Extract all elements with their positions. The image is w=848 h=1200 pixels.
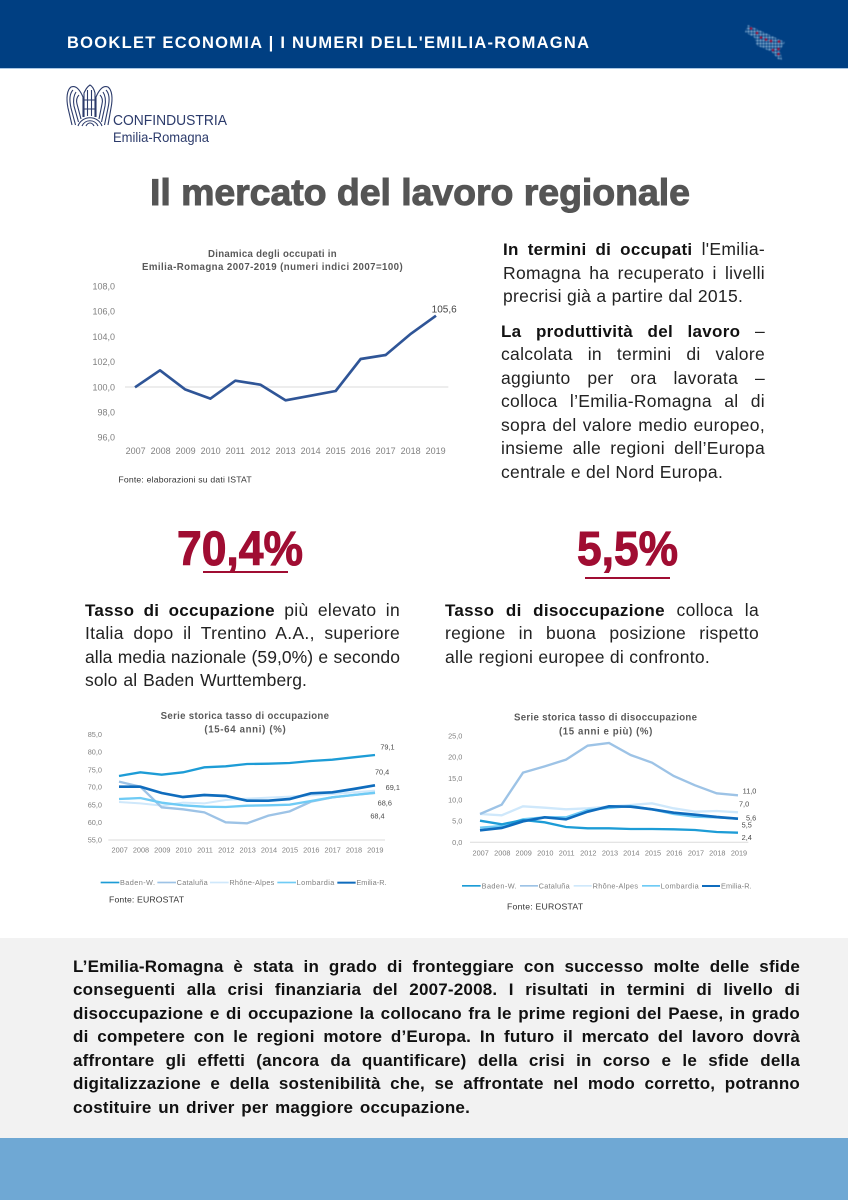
conclusion text: disoccupazione e di occupazione la collocano fra le prime regioni del Paese, in grado bbox=[73, 1004, 800, 1023]
text: tasso di occupazione: Italia dopo il Trentino A.A., superiore bbox=[85, 623, 400, 643]
text: produttività: La produttività del lavoro – bbox=[501, 321, 765, 341]
text: tasso di occupazione: Tasso di occupazione più elevato in bbox=[85, 600, 400, 620]
y axis labels bbox=[93, 282, 115, 443]
chart title: (15 anni e più) (%) bbox=[559, 726, 652, 737]
x axis labels: 2012 bbox=[250, 446, 270, 456]
y axis labels: 0,0 bbox=[452, 838, 462, 847]
end value labels: 2,4 bbox=[742, 833, 752, 842]
text: tasso di occupazione: solo al Baden Wurttemberg. bbox=[85, 670, 307, 690]
x axis labels: 2017 bbox=[688, 849, 704, 858]
panel: conclusion bbox=[0, 938, 848, 1138]
x axis labels: 2014 bbox=[623, 849, 639, 858]
text: occupati bbox=[503, 239, 765, 306]
legend: Baden-W. bbox=[482, 881, 517, 890]
end value labels: 11,0 bbox=[743, 787, 756, 796]
y axis labels bbox=[88, 730, 102, 845]
chart title bbox=[514, 713, 698, 737]
chart title: Emilia-Romagna 2007-2019 (numeri indici 2007=100) bbox=[142, 262, 403, 273]
y axis labels: 70,0 bbox=[88, 783, 102, 792]
header title: BOOKLET ECONOMIA | I NUMERI DELL'EMILIA-ROMAGNA bbox=[67, 34, 589, 52]
end value labels: 68,4 bbox=[370, 812, 385, 821]
text: occupati: Romagna ha recuperato i livelli bbox=[503, 263, 765, 283]
text: produttività: aggiunto per ora lavorata – bbox=[501, 368, 765, 388]
chart title: Dinamica degli occupati in bbox=[208, 249, 337, 260]
y axis labels: 80,0 bbox=[88, 748, 102, 757]
source note: Fonte: elaborazioni su dati ISTAT bbox=[118, 474, 252, 484]
x axis labels bbox=[473, 849, 747, 858]
stat: 5,5%: 5,5% bbox=[577, 523, 678, 576]
x axis labels: 2018 bbox=[346, 846, 362, 855]
y axis labels: 108,0 bbox=[93, 282, 115, 292]
conclusion text: di competere con le regioni motore d’Europa. In futuro il mercato del lavoro dovrà bbox=[73, 1027, 800, 1046]
source note: Fonte: EUROSTAT bbox=[109, 895, 185, 905]
x axis labels: 2015 bbox=[326, 446, 346, 456]
y axis labels: 106,0 bbox=[93, 307, 115, 317]
y axis labels: 75,0 bbox=[88, 765, 102, 774]
end value labels bbox=[370, 743, 400, 821]
line: Cataluña bbox=[480, 743, 738, 814]
x axis labels: 2013 bbox=[276, 446, 296, 456]
legend: Emilia-R. bbox=[721, 881, 752, 890]
text: produttività: sopra del valore medio europeo, bbox=[501, 415, 765, 435]
x axis labels: 2015 bbox=[282, 846, 298, 855]
header band bbox=[0, 0, 848, 69]
text: produttività: calcolata in termini di valore bbox=[501, 344, 765, 364]
x axis labels: 2019 bbox=[426, 446, 446, 456]
x axis labels: 2012 bbox=[580, 849, 596, 858]
y axis labels: 55,0 bbox=[88, 836, 102, 845]
x axis labels: 2008 bbox=[494, 849, 510, 858]
x axis labels: 2017 bbox=[376, 446, 396, 456]
x axis labels: 2011 bbox=[197, 846, 213, 855]
x axis labels: 2009 bbox=[154, 846, 170, 855]
end value labels: 79,1 bbox=[380, 743, 395, 752]
x axis labels: 2013 bbox=[240, 846, 256, 855]
x axis labels: 2019 bbox=[731, 849, 747, 858]
x axis labels: 2013 bbox=[602, 849, 618, 858]
end value labels: 7,0 bbox=[739, 799, 749, 808]
line: Emilia-R. bbox=[480, 806, 738, 830]
text: tasso di occupazione: alla media nazionale (59,0%) e secondo bbox=[85, 647, 400, 667]
chart title bbox=[161, 711, 330, 736]
text: occupati: precrisi già a partire dal 2015. bbox=[503, 286, 743, 306]
x axis labels: 2010 bbox=[537, 849, 553, 858]
x axis labels: 2009 bbox=[176, 446, 196, 456]
y axis labels: 5,0 bbox=[452, 817, 462, 826]
x axis labels: 2016 bbox=[666, 849, 682, 858]
end value labels: 68,6 bbox=[378, 798, 392, 807]
icon: eagle emblem bbox=[67, 85, 112, 126]
x axis labels: 2011 bbox=[226, 446, 245, 456]
legend: Lombardia bbox=[661, 881, 700, 890]
text: produttività bbox=[501, 321, 765, 482]
logo: Confindustria Emilia-Romagna bbox=[67, 85, 227, 145]
x axis labels: 2007 bbox=[126, 446, 146, 456]
chart title bbox=[142, 249, 403, 273]
conclusion text: conseguenti alla crisi finanziaria del 2007-2008. I risultati in termini di livello di bbox=[73, 980, 800, 999]
end value labels: 5,5 bbox=[742, 821, 752, 830]
conclusion text: costituire un driver per maggiore occupazione. bbox=[73, 1098, 470, 1117]
conclusion text: digitalizzazione e della sostenibilità che, se affrontate nel modo corretto, potranno bbox=[73, 1074, 800, 1093]
x axis labels: 2017 bbox=[325, 846, 341, 855]
line: Baden-W. bbox=[119, 755, 375, 776]
y axis labels: 85,0 bbox=[88, 730, 102, 739]
title: Il mercato del lavoro regionale bbox=[150, 171, 690, 213]
x axis labels: 2007 bbox=[112, 846, 128, 855]
legend: Rhône-Alpes bbox=[593, 881, 638, 890]
line: occupati index bbox=[135, 316, 436, 400]
y axis labels: 15,0 bbox=[448, 774, 462, 783]
x axis labels: 2016 bbox=[303, 846, 319, 855]
line: Lombardia bbox=[480, 806, 738, 828]
chart title: Serie storica tasso di disoccupazione bbox=[514, 713, 698, 724]
legend: Rhône-Alpes bbox=[229, 878, 275, 887]
line: Emilia-R. bbox=[119, 785, 375, 801]
x axis labels: 2008 bbox=[133, 846, 149, 855]
legend bbox=[101, 878, 387, 887]
logo wordmark: CONFINDUSTRIA bbox=[113, 113, 227, 129]
y axis labels bbox=[448, 732, 462, 847]
stat: 70,4%: 70,4% bbox=[177, 523, 303, 576]
y axis labels: 100,0 bbox=[93, 382, 115, 392]
text: tasso di disoccupazione: Tasso di disoccupazione colloca la bbox=[445, 600, 759, 620]
source note: Fonte: EUROSTAT bbox=[507, 901, 584, 911]
chart: dinamica degli occupati bbox=[93, 249, 457, 484]
value label: 105,6 bbox=[432, 304, 457, 315]
chart title: (15-64 anni) (%) bbox=[204, 725, 286, 736]
legend: Lombardia bbox=[297, 878, 335, 887]
legend bbox=[462, 881, 752, 890]
x axis labels bbox=[126, 446, 446, 456]
x axis labels: 2007 bbox=[473, 849, 489, 858]
text: produttività: colloca l’Emilia-Romagna al di bbox=[501, 391, 765, 411]
text: tasso di disoccupazione bbox=[445, 600, 759, 667]
line: Rhône-Alpes bbox=[480, 803, 738, 815]
end value labels: 5,6 bbox=[746, 813, 756, 822]
y axis labels: 20,0 bbox=[448, 752, 462, 761]
y axis labels: 98,0 bbox=[97, 407, 115, 417]
chart: tasso di occupazione bbox=[88, 711, 400, 905]
x axis labels: 2018 bbox=[401, 446, 421, 456]
text: produttività: centrale e del Nord Europa. bbox=[501, 462, 723, 482]
x axis labels: 2015 bbox=[645, 849, 661, 858]
line: Lombardia bbox=[119, 793, 375, 807]
text: tasso di disoccupazione: alle regioni europee di confronto. bbox=[445, 647, 710, 667]
y axis labels: 65,0 bbox=[88, 800, 102, 809]
x axis labels: 2008 bbox=[151, 446, 171, 456]
footer band bbox=[0, 1138, 848, 1200]
x axis labels: 2009 bbox=[516, 849, 532, 858]
text: tasso di occupazione bbox=[85, 600, 400, 690]
x axis labels: 2011 bbox=[559, 849, 575, 858]
end value labels: 70,4 bbox=[375, 768, 389, 777]
end value labels bbox=[739, 787, 756, 842]
logo subtitle: Emilia-Romagna bbox=[113, 129, 209, 145]
x axis labels: 2010 bbox=[176, 846, 192, 855]
line: Baden-W. bbox=[480, 820, 738, 833]
text: produttività: insieme alle regioni dell’Europa bbox=[501, 438, 765, 458]
legend: Baden-W. bbox=[120, 878, 155, 887]
y axis labels: 96,0 bbox=[97, 433, 115, 443]
line: Cataluña bbox=[119, 782, 375, 823]
x axis labels: 2012 bbox=[218, 846, 234, 855]
legend: Emilia-R. bbox=[356, 878, 387, 887]
conclusion text: L’Emilia-Romagna è stata in grado di fronteggiare con successo molte delle sfide bbox=[73, 957, 800, 976]
text: occupati: In termini di occupati l'Emilia- bbox=[503, 239, 765, 259]
conclusion text bbox=[73, 957, 800, 1117]
x axis labels bbox=[112, 846, 383, 855]
legend: Cataluña bbox=[539, 881, 571, 890]
x axis labels: 2018 bbox=[709, 849, 725, 858]
x axis labels: 2014 bbox=[261, 846, 277, 855]
x axis labels: 2014 bbox=[301, 446, 321, 456]
y axis labels: 102,0 bbox=[93, 357, 115, 367]
chart: tasso di disoccupazione bbox=[448, 713, 756, 911]
y axis labels: 60,0 bbox=[88, 818, 102, 827]
x axis labels: 2019 bbox=[367, 846, 383, 855]
end value labels: 69,1 bbox=[386, 783, 400, 792]
legend: Cataluña bbox=[177, 878, 209, 887]
text: tasso di disoccupazione: regione in buona posizione rispetto bbox=[445, 623, 759, 643]
icon: dotted region map bbox=[745, 25, 785, 60]
x axis labels: 2016 bbox=[351, 446, 371, 456]
x axis labels: 2010 bbox=[201, 446, 221, 456]
line: Rhône-Alpes bbox=[119, 791, 375, 806]
y axis labels: 25,0 bbox=[448, 732, 462, 741]
y axis labels: 104,0 bbox=[93, 332, 115, 342]
chart title: Serie storica tasso di occupazione bbox=[161, 711, 330, 722]
y axis labels: 10,0 bbox=[448, 795, 462, 804]
conclusion text: affrontare gli effetti (ancora da quantificare) della crisi in corso e le sfide della bbox=[73, 1051, 800, 1070]
